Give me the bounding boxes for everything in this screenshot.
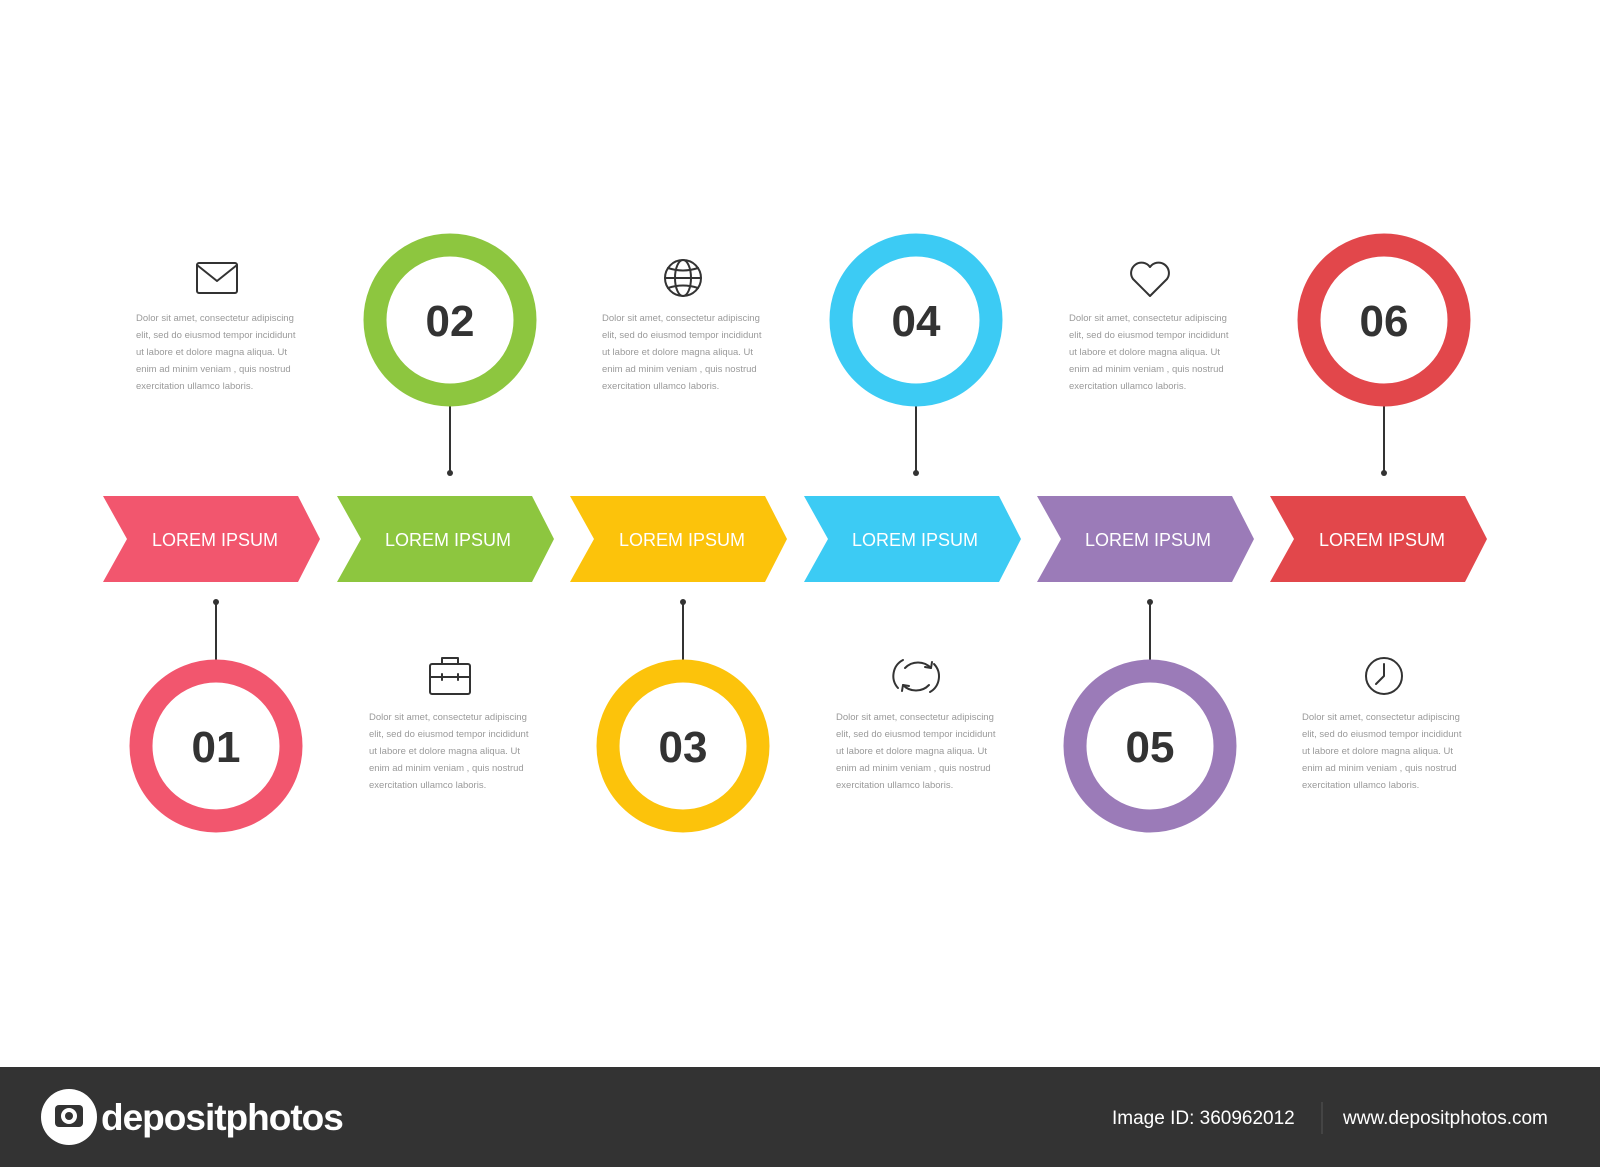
icon: heart — [1131, 263, 1169, 296]
icon: globe — [665, 260, 701, 296]
text block 1 — [136, 313, 296, 392]
image id: Image ID: 360962012 — [1112, 1108, 1295, 1129]
arrow 3: LOREM IPSUM — [619, 530, 745, 550]
circle 05: 05 — [1126, 723, 1174, 772]
circle 02 — [375, 245, 525, 476]
arrow 6: LOREM IPSUM — [1319, 530, 1445, 550]
text block 2 — [369, 712, 529, 791]
url: www.depositphotos.com — [1342, 1108, 1548, 1129]
arrow 4: LOREM IPSUM — [852, 530, 978, 550]
circle 03 — [608, 599, 758, 821]
circle 04 — [841, 245, 991, 476]
footer bar — [0, 1067, 1600, 1167]
arrow 1: LOREM IPSUM — [152, 530, 278, 550]
arrow 5: LOREM IPSUM — [1085, 530, 1211, 550]
circle 01 — [141, 599, 291, 821]
icon: briefcase — [430, 658, 470, 694]
arrow 2: LOREM IPSUM — [385, 530, 511, 550]
text block 5 — [1069, 313, 1229, 392]
text block 3 — [602, 313, 762, 392]
arrow 2 — [337, 496, 554, 582]
logo icon — [41, 1089, 97, 1145]
circle 06 — [1309, 245, 1459, 476]
circle 04: 04 — [892, 297, 941, 346]
icon: envelope — [197, 263, 237, 293]
icon: refresh — [893, 660, 939, 692]
circle 05 — [1075, 599, 1225, 821]
circle 02: 02 — [426, 297, 474, 346]
text block 6 — [1302, 712, 1462, 791]
circle 01: 01 — [192, 723, 240, 772]
arrow 3 — [570, 496, 787, 582]
circle 03: 03 — [659, 723, 707, 772]
arrow 1 — [103, 496, 320, 582]
text block 4 — [836, 712, 996, 791]
arrow 5 — [1037, 496, 1254, 582]
arrow 4 — [804, 496, 1021, 582]
arrow 6 — [1270, 496, 1487, 582]
circle 06: 06 — [1360, 297, 1408, 346]
icon: clock — [1366, 658, 1402, 694]
logo text: depositphotos — [101, 1097, 343, 1138]
